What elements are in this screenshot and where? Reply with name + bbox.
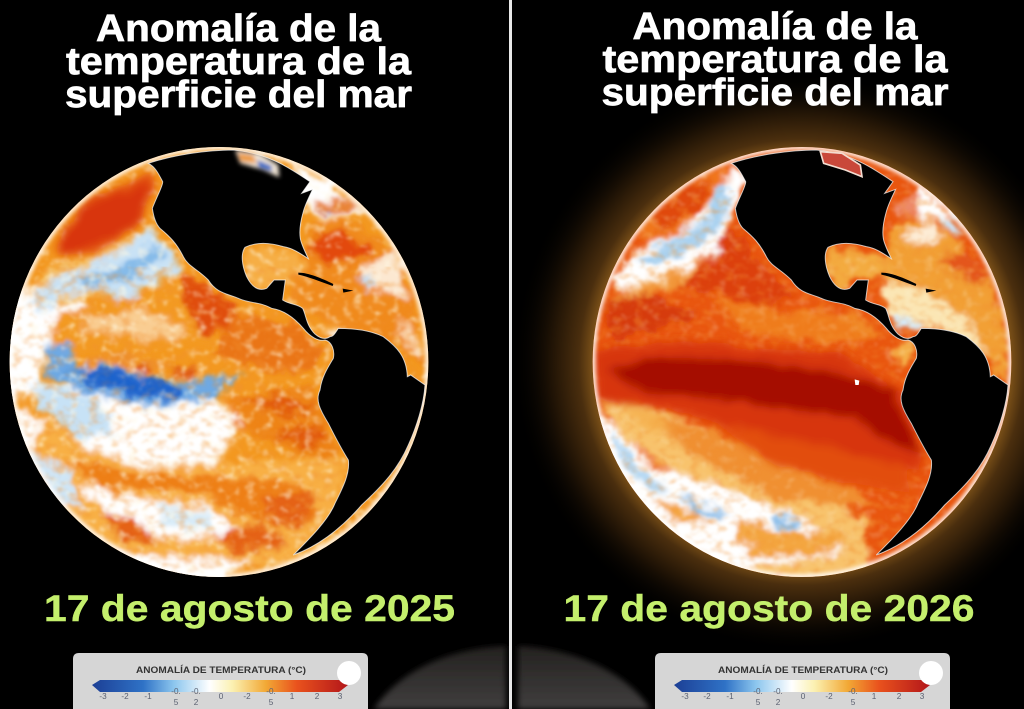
right legend: -2 [825,692,833,701]
left legend: -3 [99,692,107,701]
right legend: -0. [753,687,763,696]
right legend: -3 [681,692,689,701]
arctic ocean patch [235,150,279,177]
right grey dome behind the legend [518,646,650,709]
arctic ocean patch [820,152,862,177]
right glow around the 2026 globe [512,72,1024,652]
left grey dome behind the legend [374,646,506,709]
right date: 17 de agosto de 2026 [564,588,974,629]
left legend: -0. [171,687,181,696]
right legend: -2 [703,692,711,701]
right legend: -0. [848,687,858,696]
left legend: ANOMALÍA DE TEMPERATURA (°C) [136,664,306,676]
right legend: -1 [726,692,734,701]
left legend: 5 [174,698,179,707]
right globe: 2026 sea surface anomaly [579,140,1019,580]
right legend [655,653,950,709]
left legend: 3 [338,692,343,701]
left legend: -1 [144,692,152,701]
left globe: 2025 sea surface anomaly [0,140,440,580]
right legend: -0. [773,687,783,696]
land masses: the Americas [148,150,425,555]
left legend: -0. [191,687,201,696]
left legend: -2 [243,692,251,701]
right legend: 1 [872,692,877,701]
right title: superficie del mar [602,72,949,114]
right legend: 5 [756,698,761,707]
left legend: -0. [266,687,276,696]
land masses: the Americas [731,150,1008,555]
left title [65,8,412,116]
left title: superficie del mar [65,74,412,116]
right title [602,6,949,114]
right title: Anomalía de la [632,6,918,48]
left legend: 2 [194,698,199,707]
right legend: ANOMALÍA DE TEMPERATURA (°C) [718,664,888,676]
right legend: 2 [776,698,781,707]
left title: temperatura de la [66,41,412,83]
divider line [509,0,512,709]
right title: temperatura de la [602,39,948,81]
right legend: 3 [920,692,925,701]
right legend: 0 [801,692,806,701]
left legend [73,653,368,709]
right legend: 2 [897,692,902,701]
right legend: 5 [851,698,856,707]
left legend: -2 [121,692,129,701]
left title: Anomalía de la [96,8,382,50]
left legend: 5 [269,698,274,707]
small white speck off South America [855,379,859,385]
left legend: 2 [315,692,320,701]
left legend: 1 [290,692,295,701]
left date: 17 de agosto de 2025 [44,588,455,629]
left legend: 0 [219,692,224,701]
